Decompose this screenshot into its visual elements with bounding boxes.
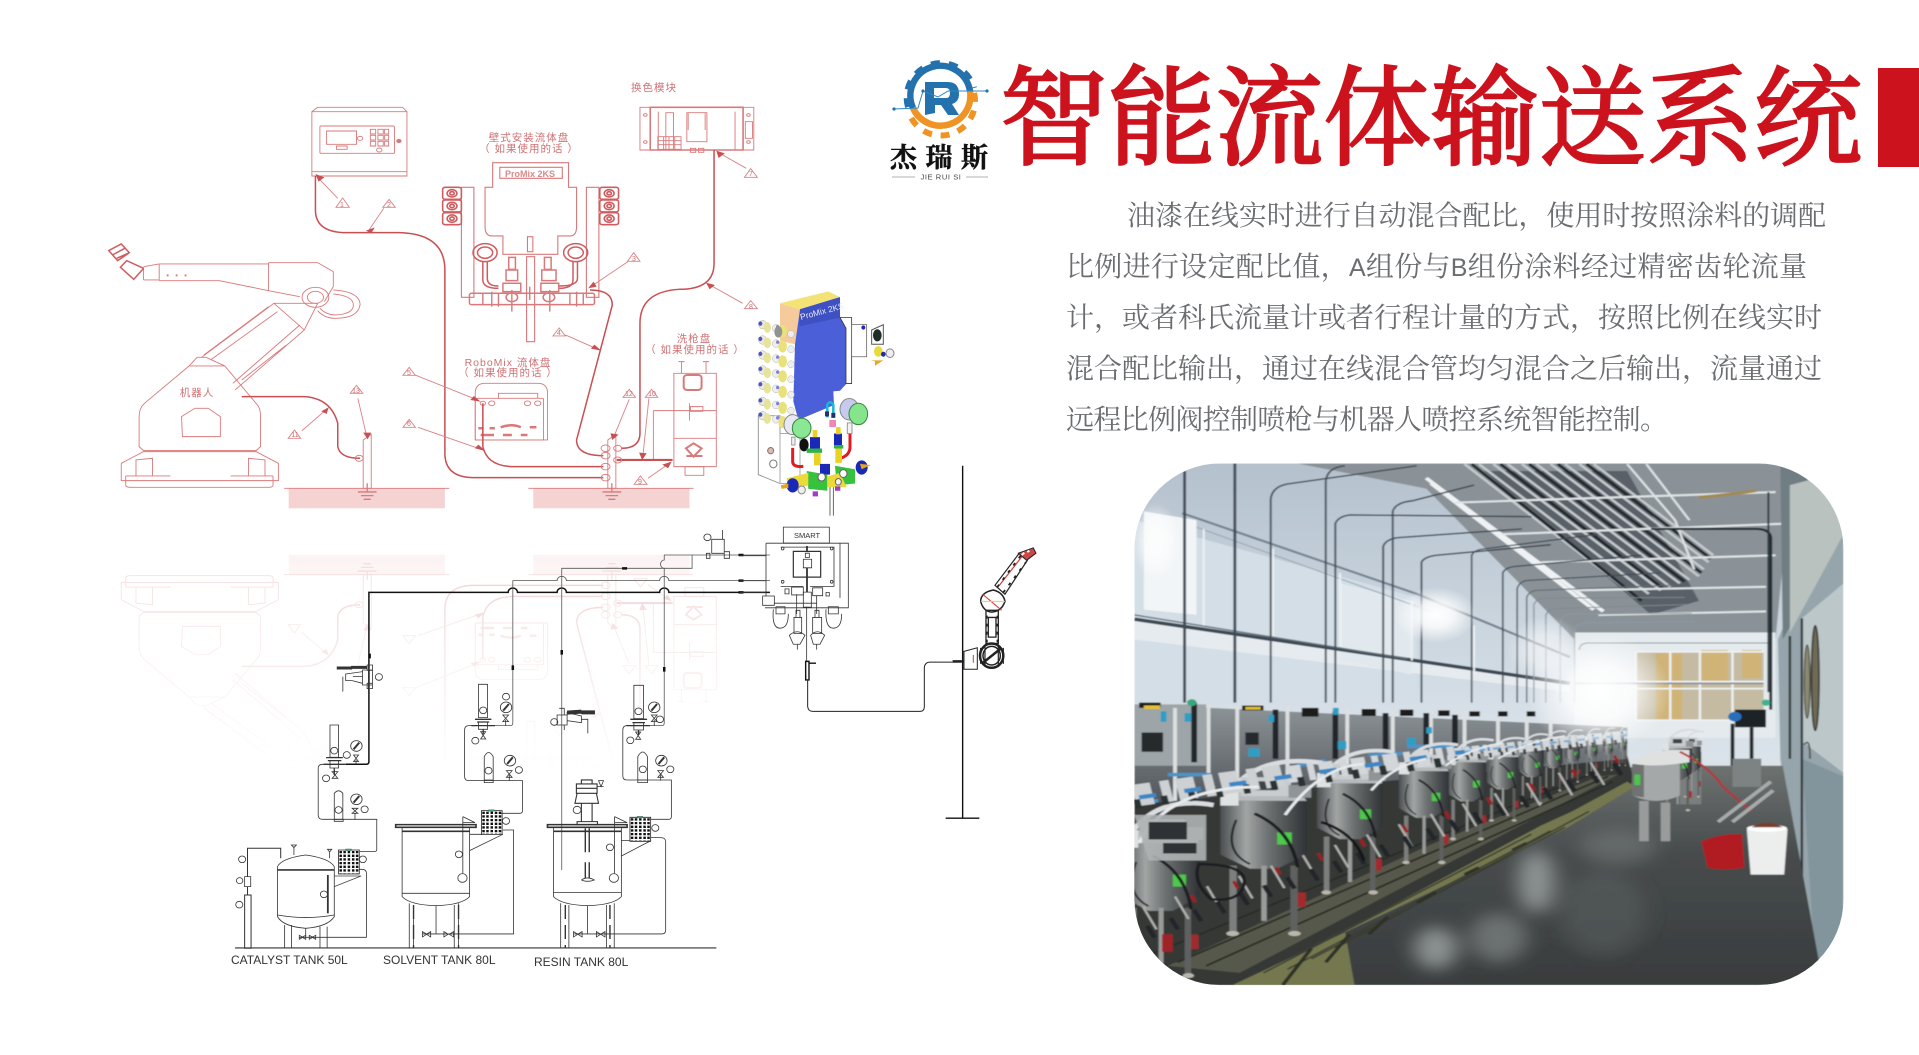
- gun washer box: [653, 362, 716, 475]
- description paragraph: [1066, 194, 1826, 438]
- booth wall: [946, 466, 979, 818]
- ground line: [235, 947, 716, 949]
- red diagram labels: （ 如果使用的话 ）: [479, 142, 579, 155]
- tank labels: SOLVENT TANK 80L: [383, 953, 496, 967]
- callout numbers: 8: [749, 304, 753, 311]
- photo: left wall: [1134, 464, 1783, 768]
- mixer, robot and 3D ProMix: [740, 291, 1036, 818]
- description paragraph: 远程比例阀控制喷枪与机器人喷控系统智能控制。: [1066, 398, 1668, 438]
- callout numbers: 3: [632, 256, 636, 263]
- red diagram labels: 换色模块: [631, 81, 677, 94]
- callout numbers: 13: [352, 388, 360, 395]
- photo: ceiling and ducts: [1297, 463, 1792, 639]
- red diagram labels: ProMix 2KS: [505, 169, 555, 179]
- description paragraph: 计，或者科氏流量计或者行程计量的方式，按照比例在线实时: [1066, 296, 1822, 336]
- photo: white bucket: [1747, 823, 1788, 875]
- 3D ProMix 2KS unit: [758, 291, 894, 516]
- faint reflection of red diagram: [120, 555, 717, 725]
- description paragraph: 油漆在线实时进行自动混合配比，使用时按照涂料的调配: [1127, 194, 1826, 234]
- red diagram labels: （ 如果使用的话 ）: [645, 343, 745, 356]
- red diagram labels: 壁式安装流体盘: [489, 131, 569, 144]
- photo: control rack row: [1134, 699, 1770, 804]
- photo: light flare: [1132, 503, 1670, 752]
- photo: floor: [1134, 755, 1823, 985]
- back pressure regulators: [551, 530, 730, 733]
- red diagram labels: RoboMix 流体盘: [465, 356, 551, 369]
- callout numbers: 7: [749, 171, 753, 178]
- cables: [242, 150, 714, 478]
- title: 智能流体输送系统: [1000, 32, 1862, 187]
- logo gear: [892, 63, 989, 136]
- photo: red bag: [1701, 834, 1744, 869]
- SMART mixing unit: [740, 527, 848, 680]
- black tank process diagram: [235, 530, 770, 948]
- logo english name: JIE RUI SI: [920, 172, 962, 182]
- photo: fittings clutter along tank tops: [1134, 735, 1627, 932]
- photo: right wall and doors: [1778, 466, 1843, 985]
- callout numbers: 5: [407, 370, 411, 377]
- red diagram labels: [180, 81, 745, 399]
- logo: [890, 63, 989, 182]
- solvent tank: [396, 684, 522, 948]
- callout numbers: 2: [387, 202, 391, 209]
- photo: spray tanks row: [1122, 727, 1628, 978]
- catalyst tank: [236, 665, 382, 948]
- callout numbers: 12: [625, 391, 633, 398]
- callout numbers: 10: [648, 391, 656, 398]
- SMART label: SMART: [794, 531, 820, 540]
- tank labels: RESIN TANK 80L: [534, 955, 629, 969]
- tank labels: [231, 953, 629, 969]
- callout triangles and leaders: [288, 151, 757, 484]
- ProMix label: ProMix 2KS: [799, 301, 845, 322]
- logo name: 杰瑞斯: [890, 136, 988, 175]
- photo: overhead pipes: [1185, 463, 1771, 710]
- photo: back wall with window: [1575, 632, 1776, 738]
- red diagram labels: 洗枪盘: [677, 332, 711, 345]
- callout numbers: 6: [407, 421, 411, 428]
- fluid hose to robot: [808, 662, 963, 711]
- RoboMix panel: [475, 383, 548, 440]
- red diagram labels: 机器人: [180, 386, 214, 399]
- description paragraph: 混合配比输出，通过在线混合管均匀混合之后输出，流量通过: [1066, 347, 1822, 387]
- piping main lines: [346, 555, 770, 870]
- color change module box: [640, 107, 754, 152]
- callout numbers: 1: [340, 202, 344, 209]
- callout numbers: 4: [557, 330, 561, 337]
- resin tank with agitator: [547, 685, 674, 948]
- wall mounted fluid panel: [443, 163, 619, 342]
- ground posts: [284, 434, 694, 508]
- controller box: [312, 107, 407, 176]
- tank labels: CATALYST TANK 50L: [231, 953, 348, 967]
- callout numbers: 11: [291, 432, 299, 439]
- red rectangle accent: [1878, 68, 1919, 167]
- description paragraph: 比例进行设定配比值，A组份与B组份涂料经过精密齿轮流量: [1066, 245, 1807, 285]
- spray robot: [953, 548, 1036, 669]
- callout numbers: [291, 171, 753, 486]
- red installation diagram: [109, 107, 757, 508]
- callout numbers: 9: [638, 479, 642, 486]
- factory photo: [1122, 463, 1843, 985]
- photo: foreground tanks on the right: [1632, 710, 1773, 841]
- robot: [109, 244, 360, 487]
- red diagram labels: （ 如果使用的话 ）: [458, 366, 558, 379]
